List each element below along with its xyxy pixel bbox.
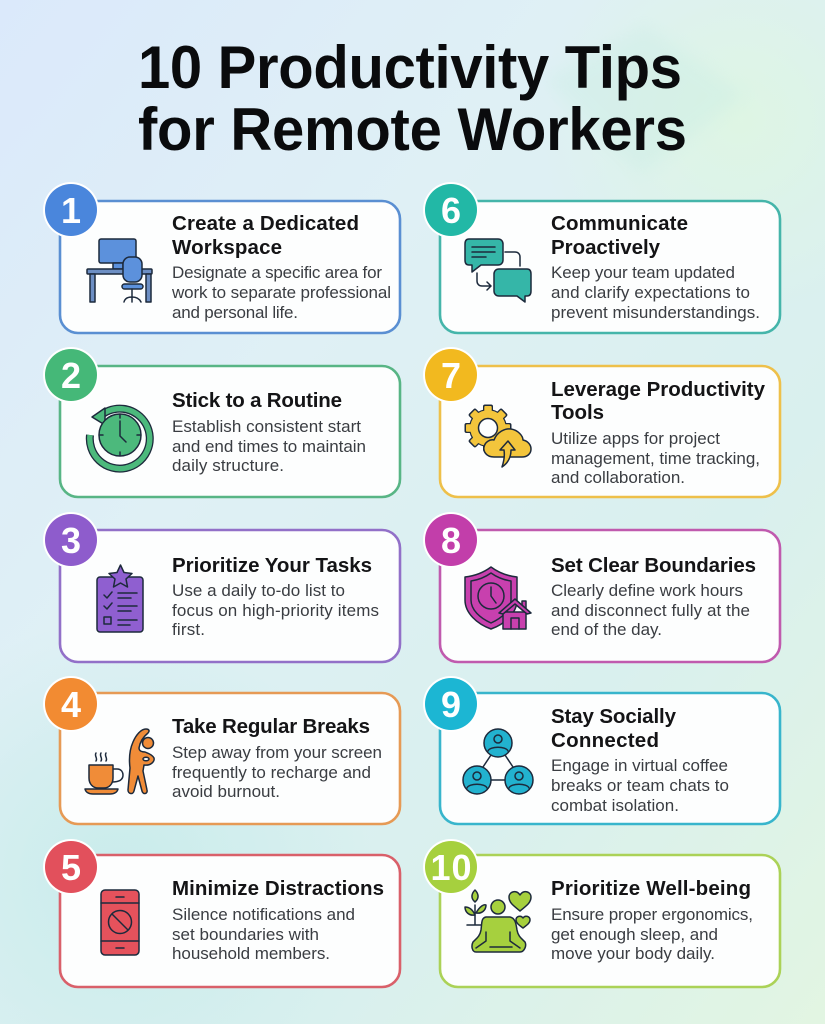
heading: Prioritize Your Tasks — [172, 554, 372, 577]
badge 5 — [43, 839, 99, 895]
panel: tip 3 — [43, 512, 400, 662]
badge 2: 2 — [61, 355, 81, 396]
icon: coffee and stretching person — [85, 729, 154, 794]
description: Use a daily to-do list to — [172, 581, 345, 600]
description: and clarify expectations to — [551, 283, 750, 302]
description: Engage in virtual coffee — [551, 756, 728, 775]
description — [172, 581, 379, 639]
badge 4 — [43, 676, 99, 732]
description: Silence notifications and — [172, 905, 355, 924]
heading: Stay Socially — [551, 705, 677, 728]
description: and end times to maintain — [172, 437, 366, 456]
heading: Tools — [551, 401, 604, 424]
description: Keep your team updated — [551, 263, 735, 282]
description: get enough sleep, and — [551, 925, 718, 944]
panel: tip 5 — [43, 839, 400, 987]
description: avoid burnout. — [172, 782, 280, 801]
badge 9: 9 — [441, 684, 461, 725]
title: for Remote Workers — [138, 95, 687, 163]
heading: Set Clear Boundaries — [551, 554, 756, 577]
heading: Proactively — [551, 236, 661, 259]
heading: Connected — [551, 729, 659, 752]
panel: tip 10 — [423, 839, 780, 987]
heading: Communicate — [551, 212, 688, 235]
description: move your body daily. — [551, 944, 715, 963]
icon: chat bubbles — [465, 239, 531, 302]
badge 2 — [43, 347, 99, 403]
description — [551, 429, 760, 487]
icon: shield, clock and house — [465, 567, 531, 629]
description — [171, 263, 391, 322]
description: Ensure proper ergonomics, — [551, 905, 753, 924]
icon: clock with circular arrow — [90, 408, 150, 469]
description — [551, 263, 760, 322]
panel: tip 6 — [423, 182, 780, 333]
title: 10 Productivity Tips — [138, 33, 682, 101]
panel: tip 9 — [423, 676, 780, 824]
description: work to separate professional — [171, 283, 391, 302]
badge 10 — [423, 839, 479, 895]
description: first. — [172, 620, 205, 639]
heading — [551, 705, 677, 752]
heading: Create a Dedicated — [172, 212, 359, 235]
icon: connected people — [463, 729, 533, 794]
description: set boundaries with — [172, 925, 319, 944]
description: Utilize apps for project — [551, 429, 720, 448]
description — [551, 581, 750, 639]
heading — [551, 212, 688, 259]
description: and collaboration. — [551, 468, 685, 487]
icon: desk and chair — [87, 239, 152, 302]
badge 5: 5 — [61, 847, 81, 888]
description — [172, 905, 355, 963]
description: household members. — [172, 944, 330, 963]
panel: tip 1 — [43, 182, 400, 333]
description: management, time tracking, — [551, 449, 760, 468]
description: and disconnect fully at the — [551, 601, 750, 620]
badge 4: 4 — [61, 684, 81, 725]
description: focus on high-priority items — [172, 601, 379, 620]
heading: Leverage Productivity — [551, 378, 766, 401]
panel: tip 2 — [43, 347, 400, 497]
description — [172, 743, 382, 801]
badge 9 — [423, 676, 479, 732]
badge 6: 6 — [441, 190, 461, 231]
description: Clearly define work hours — [551, 581, 743, 600]
badge 1: 1 — [61, 190, 81, 231]
heading — [551, 378, 766, 424]
heading — [172, 212, 359, 259]
badge 7: 7 — [441, 355, 461, 396]
description: Designate a specific area for — [172, 263, 382, 282]
description: Establish consistent start — [172, 417, 361, 436]
heading: Workspace — [172, 236, 282, 259]
description: frequently to recharge and — [172, 763, 371, 782]
heading: Take Regular Breaks — [172, 715, 370, 738]
icon: priority checklist — [97, 565, 143, 632]
icon: phone with no-notifications sign — [101, 890, 139, 955]
description — [551, 905, 753, 963]
description: end of the day. — [551, 620, 662, 639]
badge 3 — [43, 512, 99, 568]
badge 8 — [423, 512, 479, 568]
badge 3: 3 — [61, 520, 81, 561]
title — [138, 33, 687, 163]
description: daily structure. — [172, 456, 284, 475]
description: and personal life. — [172, 303, 298, 322]
badge 7 — [423, 347, 479, 403]
heading: Minimize Distractions — [172, 877, 384, 900]
panel: tip 8 — [423, 512, 780, 662]
badge 1 — [43, 182, 99, 238]
badge 6 — [423, 182, 479, 238]
icon: gear and cloud upload — [464, 404, 531, 467]
panel: tip 7 — [423, 347, 780, 497]
description: Step away from your screen — [172, 743, 382, 762]
panel: tip 4 — [43, 676, 400, 824]
icon: meditating person with plant and hearts — [465, 890, 531, 952]
description — [172, 417, 366, 475]
heading: Prioritize Well-being — [551, 877, 751, 900]
heading: Stick to a Routine — [172, 389, 342, 412]
description — [551, 756, 729, 815]
description: combat isolation. — [551, 796, 679, 815]
badge 10: 10 — [430, 847, 472, 888]
badge 8: 8 — [441, 520, 461, 561]
description: breaks or team chats to — [551, 776, 729, 795]
description: prevent misunderstandings. — [551, 303, 760, 322]
